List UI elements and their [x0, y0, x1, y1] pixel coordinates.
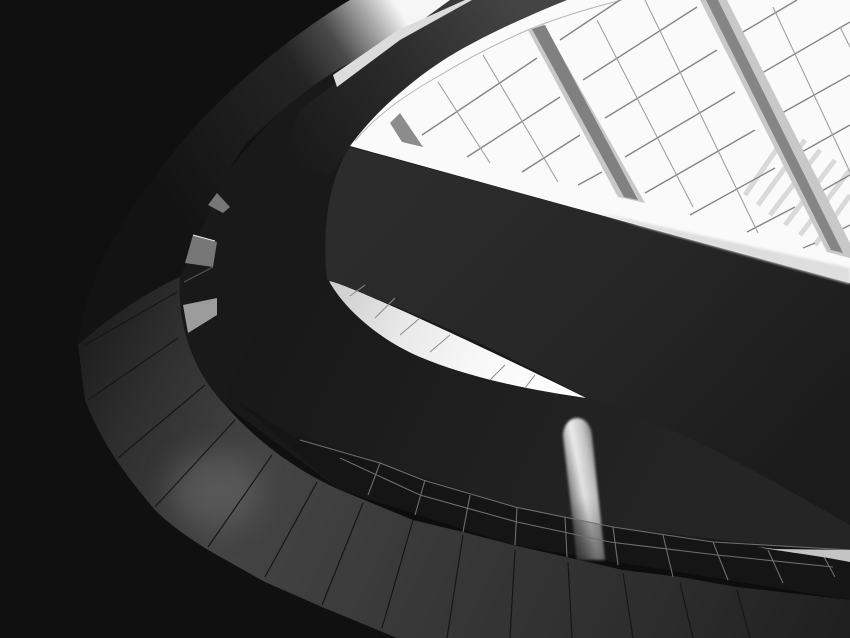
bright opening at right edge [757, 547, 850, 562]
railing glass [235, 400, 850, 600]
skylight grid [422, 0, 850, 248]
curved floor band with tiles [78, 277, 850, 638]
dark wall [325, 147, 850, 525]
skylight beams [528, 23, 645, 203]
dark band under the light rail [280, 0, 570, 175]
sill along wall top [600, 213, 850, 284]
upper curved ring [78, 0, 470, 345]
lower floor region [225, 280, 850, 550]
glowing column [563, 418, 605, 560]
bright rail strip [333, 0, 472, 87]
shaded panes at right [745, 130, 850, 245]
small openings on left [183, 193, 230, 333]
bright slit opening [329, 281, 586, 398]
skylight rim [355, 0, 622, 141]
skylight [350, 0, 850, 284]
handrail [300, 440, 850, 583]
inner atrium structure [180, 0, 850, 600]
